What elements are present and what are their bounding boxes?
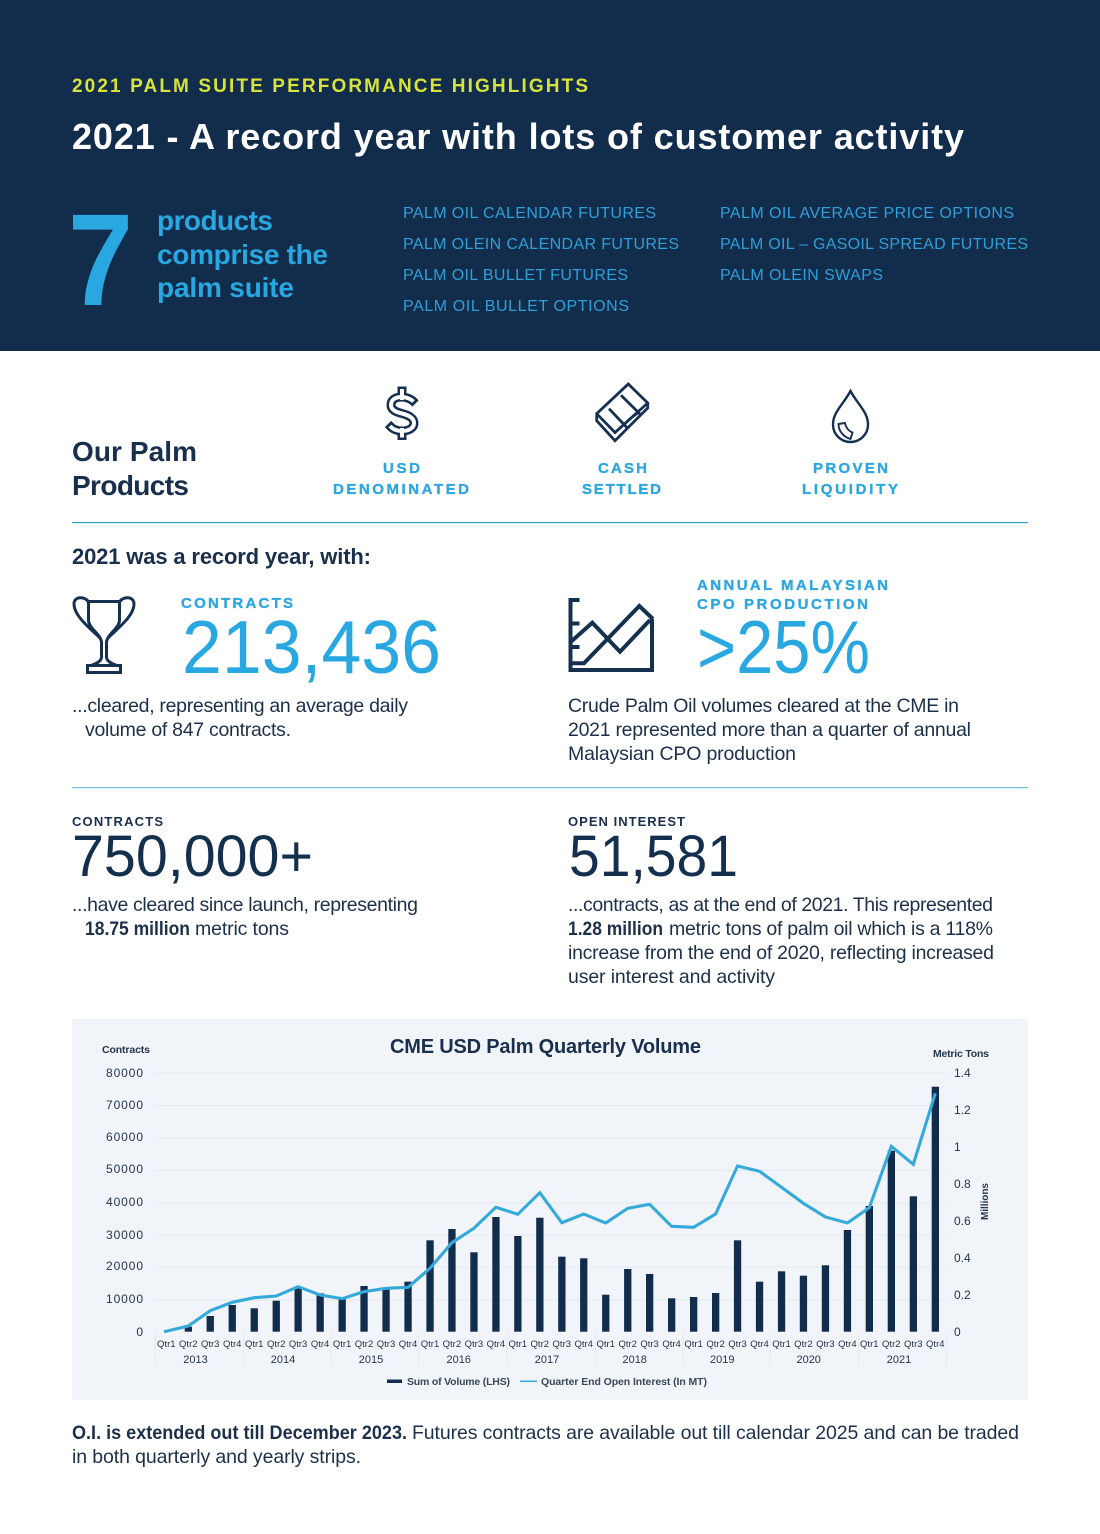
product list: PALM OLEIN SWAPS — [720, 267, 883, 284]
heading: our palm products: Products — [72, 470, 189, 501]
quarter labels: Qtr2 — [882, 1339, 901, 1350]
text: since launch description: 18.75 million — [85, 918, 190, 940]
products tagline — [157, 205, 328, 303]
quarter labels: Qtr3 — [377, 1339, 395, 1350]
stat: contracts cleared: CONTRACTS — [181, 595, 293, 612]
quarter labels: Qtr1 — [860, 1339, 879, 1350]
quarter labels: Qtr2 — [179, 1339, 198, 1350]
text: open interest description: increase from the end of 2020, reflecting increased — [568, 942, 994, 964]
text: open interest description: user interest and activity — [568, 966, 775, 988]
text: since launch description: ...have cleared since launch, representing — [72, 894, 418, 916]
year labels: 2020 — [796, 1354, 821, 1366]
legend: Quarter End Open Interest (In MT) — [541, 1376, 707, 1388]
text: open interest description — [568, 894, 994, 988]
right axis labels: 1.2 — [954, 1103, 971, 1117]
text: open interest description: ...contracts, as at the end of 2021. This represented — [568, 894, 993, 916]
year labels: 2018 — [622, 1354, 647, 1366]
right axis labels: 0.2 — [954, 1288, 971, 1302]
quarter labels: Qtr3 — [201, 1339, 219, 1350]
products tagline: palm suite — [157, 272, 294, 303]
icon: area chart — [570, 598, 653, 670]
quarter labels: Qtr3 — [816, 1339, 835, 1350]
eyebrow heading: 2021 PALM SUITE PERFORMANCE HIGHLIGHTS — [72, 76, 588, 97]
text: contracts description: volume of 847 contracts. — [85, 719, 291, 741]
line series: quarter end open interest — [164, 1093, 935, 1332]
right axis labels: 0.4 — [954, 1251, 971, 1265]
stat: cpo production: >25% — [697, 605, 870, 689]
product list — [403, 205, 1028, 315]
left axis labels: 20000 — [106, 1259, 143, 1273]
text: open interest description: 1.28 million — [568, 918, 663, 940]
product list: PALM OIL BULLET FUTURES — [403, 267, 628, 284]
left axis labels: 30000 — [106, 1228, 143, 1242]
axis title: metric tons: Metric Tons — [933, 1048, 989, 1060]
quarter labels: Qtr4 — [311, 1339, 329, 1350]
icon: trophy — [74, 598, 134, 672]
text: since launch description: metric tons — [195, 918, 289, 940]
year labels: 2014 — [271, 1354, 295, 1366]
year labels: 2019 — [710, 1354, 735, 1366]
right axis labels: 0.8 — [954, 1177, 971, 1191]
label: cash settled: SETTLED — [582, 481, 661, 498]
text: open interest description: metric tons of palm oil which is a 118% — [669, 918, 993, 940]
left axis labels — [106, 1066, 143, 1339]
quarter labels: Qtr1 — [509, 1339, 527, 1350]
label: usd denominated: USD — [383, 460, 420, 477]
quarter labels: Qtr4 — [574, 1339, 593, 1350]
quarter labels: Qtr1 — [157, 1339, 176, 1350]
label: usd denominated — [333, 460, 469, 498]
main title: 2021 - A record year with lots of customer activity — [72, 116, 964, 157]
quarter labels: Qtr3 — [289, 1339, 307, 1350]
year labels: 2013 — [183, 1354, 208, 1366]
year labels: 2016 — [446, 1354, 471, 1366]
chart title: CME USD Palm Quarterly Volume — [390, 1036, 701, 1058]
footer note — [72, 1422, 1019, 1468]
text: cpo description — [568, 695, 971, 765]
label: usd denominated: DENOMINATED — [333, 481, 469, 498]
year labels — [183, 1354, 911, 1366]
quarter labels: Qtr3 — [465, 1339, 483, 1350]
quarter labels: Qtr1 — [596, 1339, 615, 1350]
quarter labels: Qtr2 — [531, 1339, 549, 1350]
label: proven liquidity — [802, 460, 898, 498]
text: cpo description: Crude Palm Oil volumes cleared at the CME in — [568, 695, 959, 717]
text: since launch description — [72, 894, 418, 940]
subheading: record year: 2021 was a record year, with: — [72, 544, 371, 569]
quarter labels: Qtr4 — [662, 1339, 681, 1350]
footer note: Futures contracts are available out till calendar 2025 and can be traded — [412, 1422, 1019, 1444]
panel: header banner — [0, 0, 1100, 351]
quarter labels: Qtr4 — [926, 1339, 945, 1350]
label: cash settled — [582, 460, 661, 498]
product list: PALM OIL BULLET OPTIONS — [403, 298, 629, 315]
year labels: 2015 — [359, 1354, 383, 1366]
label: cash settled: CASH — [598, 460, 647, 477]
product list: PALM OIL CALENDAR FUTURES — [403, 205, 656, 222]
quarter labels: Qtr3 — [640, 1339, 659, 1350]
label: proven liquidity: PROVEN — [813, 460, 888, 477]
right axis labels: 1 — [954, 1140, 961, 1154]
right axis labels: 1.4 — [954, 1066, 971, 1080]
quarter labels: Qtr4 — [399, 1339, 417, 1350]
quarter labels: Qtr1 — [421, 1339, 439, 1350]
axis title: millions: Millions — [980, 1183, 991, 1220]
quarter labels: Qtr2 — [618, 1339, 637, 1350]
left axis labels: 50000 — [106, 1162, 143, 1176]
axis title: contracts: Contracts — [102, 1044, 150, 1056]
products tagline: products — [157, 205, 273, 236]
quarter labels: Qtr1 — [772, 1339, 791, 1350]
quarter labels: Qtr4 — [750, 1339, 769, 1350]
text: cpo description: 2021 represented more than a quarter of annual — [568, 719, 971, 741]
text: contracts description: ...cleared, representing an average daily — [72, 695, 408, 717]
left axis labels: 80000 — [106, 1066, 143, 1080]
text: contracts description — [72, 695, 408, 741]
product list: PALM OLEIN CALENDAR FUTURES — [403, 236, 679, 253]
product list: PALM OIL – GASOIL SPREAD FUTURES — [720, 236, 1028, 253]
right axis labels: 0 — [954, 1325, 961, 1339]
text: cpo description: Malaysian CPO production — [568, 743, 796, 765]
icon: cash notes — [597, 384, 648, 441]
quarter labels: Qtr1 — [684, 1339, 703, 1350]
quarter labels: Qtr1 — [245, 1339, 263, 1350]
stat: contracts since launch: CONTRACTS — [72, 814, 163, 829]
left axis labels: 0 — [136, 1325, 143, 1339]
right axis labels — [954, 1066, 971, 1339]
quarter labels: Qtr2 — [267, 1339, 285, 1350]
left axis labels: 40000 — [106, 1195, 143, 1209]
big number seven: 7 — [68, 186, 133, 333]
quarter labels: Qtr2 — [355, 1339, 373, 1350]
quarter labels: Qtr1 — [333, 1339, 351, 1350]
icon: oil drop — [833, 391, 868, 442]
right axis labels: 0.6 — [954, 1214, 971, 1228]
quarter labels — [157, 1339, 945, 1350]
legend — [387, 1376, 707, 1388]
footer note: in both quarterly and yearly strips. — [72, 1446, 361, 1468]
heading: our palm products — [72, 436, 197, 501]
quarter labels: Qtr3 — [904, 1339, 923, 1350]
quarter labels: Qtr2 — [794, 1339, 813, 1350]
stat: contracts since launch: 750,000+ — [72, 824, 313, 889]
quarter labels: Qtr4 — [838, 1339, 857, 1350]
panel: quarterly volume chart — [72, 1019, 1028, 1400]
quarter labels: Qtr4 — [223, 1339, 241, 1350]
year labels: 2017 — [535, 1354, 559, 1366]
quarter labels: Qtr3 — [728, 1339, 747, 1350]
footer note: O.I. is extended out till December 2023. — [72, 1422, 407, 1444]
label: proven liquidity: LIQUIDITY — [802, 481, 898, 498]
bar series: sum of volume — [185, 1087, 939, 1332]
legend: Sum of Volume (LHS) — [407, 1376, 510, 1388]
products tagline: comprise the — [157, 239, 328, 270]
stat: contracts cleared: 213,436 — [182, 605, 441, 689]
quarter labels: Qtr3 — [553, 1339, 571, 1350]
icon: dollar sign — [388, 386, 416, 440]
product list: PALM OIL AVERAGE PRICE OPTIONS — [720, 205, 1014, 222]
left axis labels: 10000 — [106, 1292, 143, 1306]
left axis labels: 60000 — [106, 1130, 143, 1144]
year labels: 2021 — [887, 1354, 911, 1366]
stat: open interest: 51,581 — [569, 824, 738, 889]
quarter labels: Qtr2 — [443, 1339, 461, 1350]
stat: cpo production: CPO PRODUCTION — [697, 596, 868, 613]
quarter labels: Qtr2 — [706, 1339, 725, 1350]
left axis labels: 70000 — [106, 1098, 143, 1112]
quarter labels: Qtr4 — [487, 1339, 505, 1350]
stat: cpo production: ANNUAL MALAYSIAN — [697, 577, 888, 594]
heading: our palm products: Our Palm — [72, 436, 197, 467]
stat: open interest: OPEN INTEREST — [568, 814, 685, 829]
